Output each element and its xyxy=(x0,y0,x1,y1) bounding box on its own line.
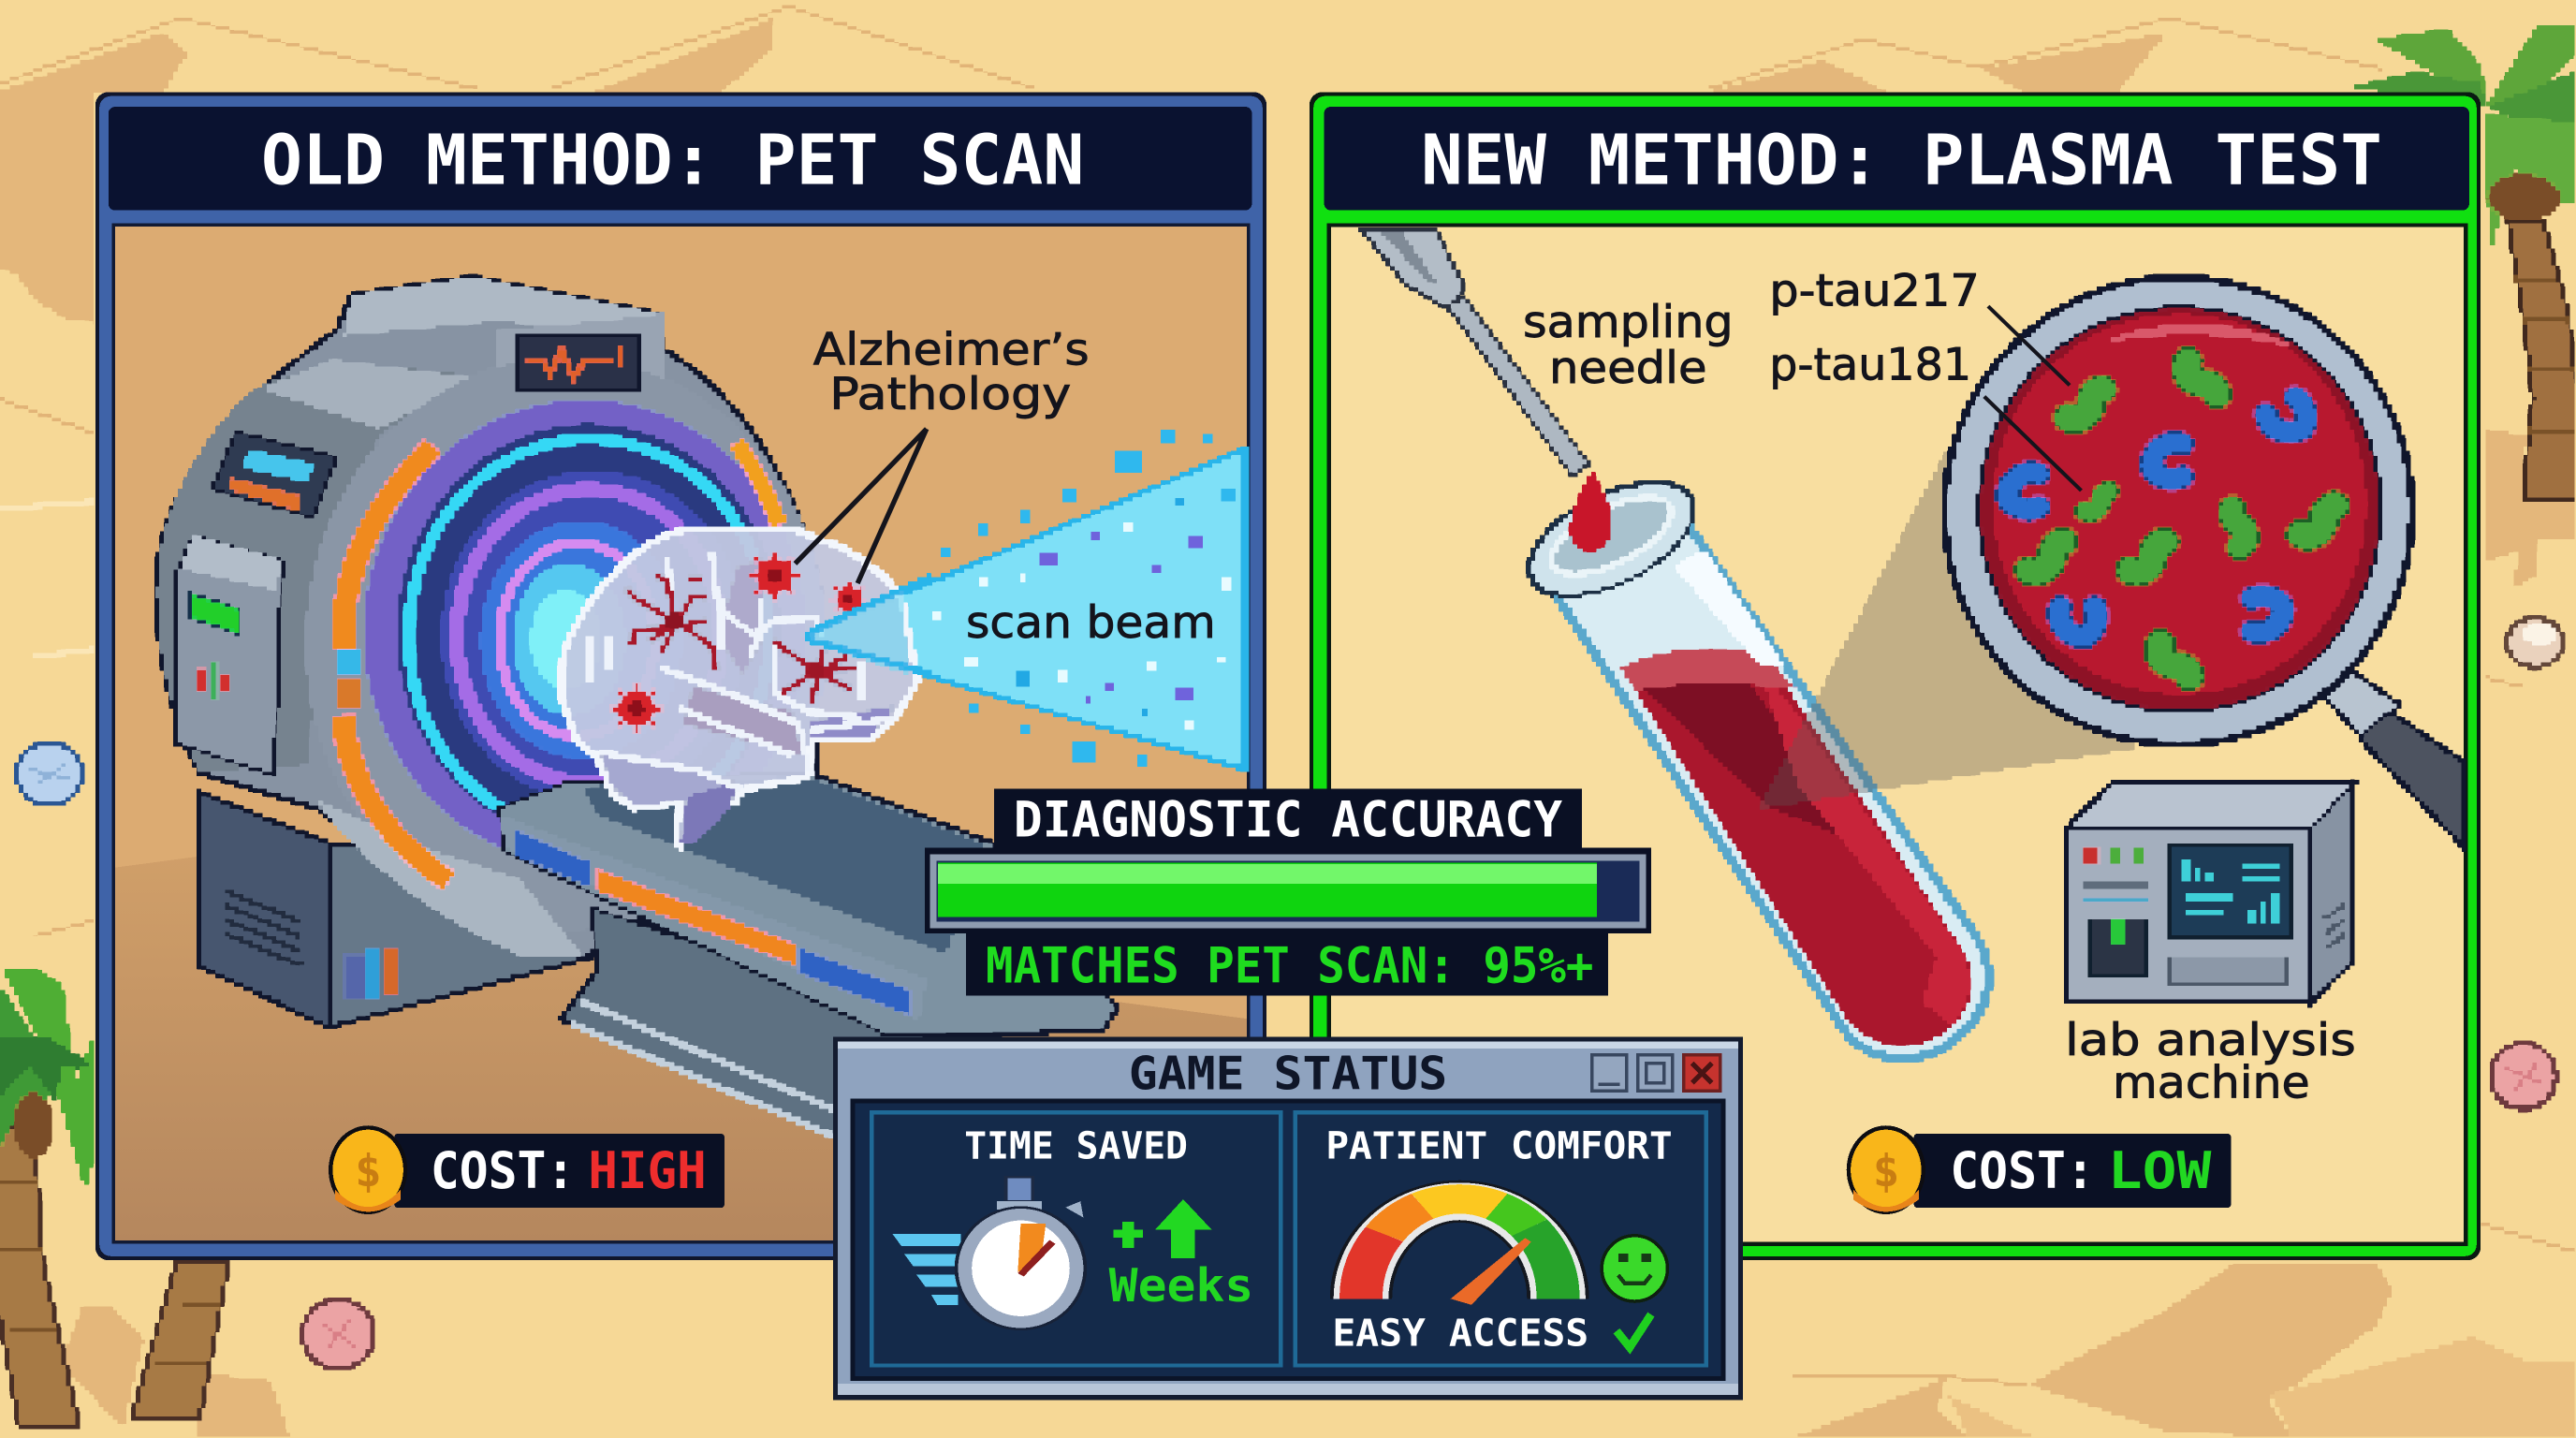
icon: winged stopwatch xyxy=(892,1177,1085,1329)
scan beam xyxy=(806,430,1245,769)
coin icon: $ xyxy=(355,1146,382,1197)
patient bed xyxy=(500,772,1117,1137)
icon: plus and up arrow xyxy=(1113,1199,1212,1258)
heading bar: old method: OLD METHOD: PET SCAN xyxy=(261,122,1084,201)
window title: GAME STATUS xyxy=(1129,1047,1447,1101)
label: p-tau217: p-tau217 xyxy=(1769,265,1980,316)
cost badge: high xyxy=(329,1125,724,1214)
shell: blue xyxy=(15,741,84,807)
window buttons xyxy=(1592,1055,1720,1091)
lab analysis machine xyxy=(2066,784,2353,1003)
icon: check mark xyxy=(1617,1314,1651,1347)
label: Alzheimer's Pathology xyxy=(813,325,1090,420)
label: sampling needle xyxy=(1523,297,1734,394)
cost badge: high: HIGH xyxy=(588,1141,707,1200)
shell: pink left xyxy=(300,1299,376,1371)
icon: comfort gauge xyxy=(1361,1199,1559,1305)
palm tree: top right xyxy=(2352,24,2576,498)
magnifier handle xyxy=(2326,668,2462,844)
status panel: time saved: TIME SAVED xyxy=(964,1123,1188,1167)
new method panel background xyxy=(1329,225,2466,1244)
diagnostic accuracy meter xyxy=(925,788,1651,996)
cost badge: high: COST: xyxy=(431,1141,575,1200)
progress bar xyxy=(925,848,1651,933)
status panel: patient comfort: EASY ACCESS xyxy=(1332,1311,1588,1355)
label: Alzheimer's Pathology: Alzheimer’s xyxy=(813,325,1090,376)
meter result: MATCHES PET SCAN: 95%+ xyxy=(986,938,1593,995)
brain with pathology xyxy=(562,529,917,846)
label: scan beam: scan beam xyxy=(966,597,1216,649)
label: sampling needle: sampling xyxy=(1523,297,1734,348)
label: sampling needle: needle xyxy=(1549,343,1707,394)
heading bar: new method xyxy=(1325,107,2469,211)
magnifier lens with proteins xyxy=(1941,274,2415,747)
game status window xyxy=(833,1036,1743,1400)
meter heading: DIAGNOSTIC ACCURACY xyxy=(1014,791,1562,848)
label: lab analysis machine: lab analysis xyxy=(2065,1015,2356,1066)
coin icon: $ xyxy=(1873,1146,1899,1197)
status panel: time saved: Weeks xyxy=(1109,1258,1253,1313)
PET scanner illustration xyxy=(157,278,1117,1137)
protein pointer lines xyxy=(1984,306,2081,491)
palm tree: bottom left xyxy=(0,970,228,1426)
status panel: time saved xyxy=(871,1112,1281,1365)
label: lab analysis machine xyxy=(2065,1015,2356,1108)
old method panel background xyxy=(111,224,1251,1244)
coin icon xyxy=(1847,1125,1925,1214)
shell: cream xyxy=(2506,616,2565,668)
shell: pink right xyxy=(2489,1042,2558,1110)
cost badge: low: LOW xyxy=(2108,1141,2212,1200)
coin icon xyxy=(329,1125,407,1214)
magnifier shadow cone xyxy=(1760,453,2136,809)
cost badge: low xyxy=(1847,1125,2231,1214)
test tube with blood xyxy=(1512,461,1988,1058)
pathology pointer lines xyxy=(795,429,927,583)
panel: old method xyxy=(95,92,1266,1260)
scan beam over brain xyxy=(805,577,929,674)
heading bar: new method: NEW METHOD: PLASMA TEST xyxy=(1421,122,2382,201)
label: lab analysis machine: machine xyxy=(2113,1057,2310,1108)
sampling needle with blood drop xyxy=(1362,228,1612,550)
status panel: patient comfort xyxy=(1295,1112,1706,1365)
label: Alzheimer's Pathology: Pathology xyxy=(829,369,1071,420)
label: p-tau181: p-tau181 xyxy=(1769,339,1971,390)
cost badge: low: COST: xyxy=(1950,1141,2095,1200)
status panel: patient comfort: PATIENT COMFORT xyxy=(1325,1123,1673,1167)
panel: new method xyxy=(1310,92,2481,1260)
icon: smiley xyxy=(1602,1236,1667,1301)
heading bar: old method xyxy=(109,107,1251,211)
